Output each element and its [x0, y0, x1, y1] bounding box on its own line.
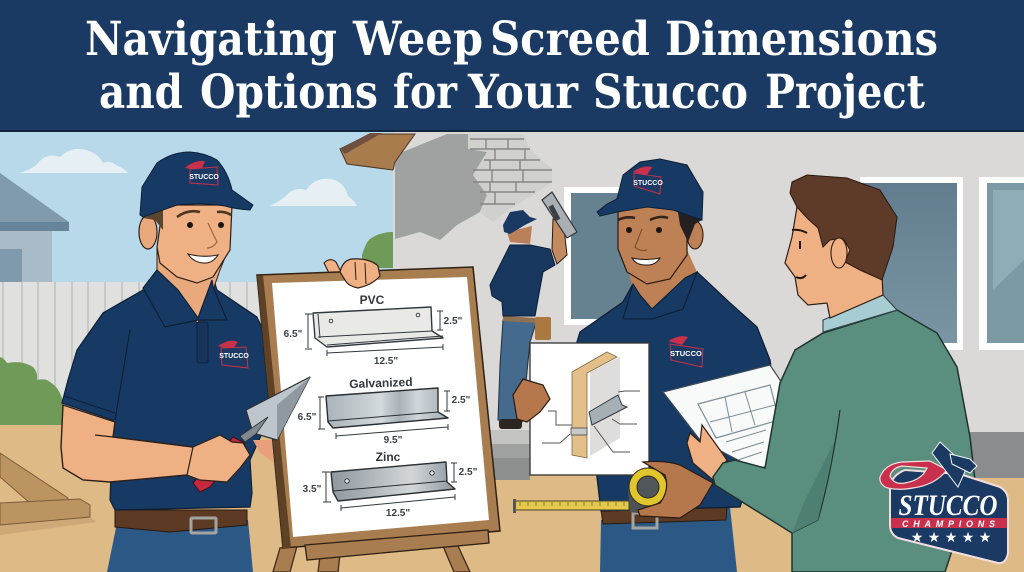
board frame — [257, 267, 500, 548]
cap logo: STUCCO — [633, 180, 663, 187]
tape blade — [513, 499, 629, 513]
torso — [490, 245, 555, 316]
forearm — [61, 405, 225, 482]
green bush behind board — [362, 232, 393, 268]
logo stars: ★ — [979, 530, 991, 546]
Zinc section — [303, 450, 478, 519]
logo wordmark: STUCCO — [898, 489, 998, 522]
title — [85, 12, 938, 120]
title banner — [0, 0, 1024, 132]
hair — [678, 212, 702, 242]
weep screed bracket — [589, 395, 627, 425]
smile — [632, 258, 660, 265]
thumb behind board — [324, 260, 342, 275]
bush left — [0, 357, 63, 425]
placket — [197, 322, 208, 363]
cap logo: STUCCO — [189, 174, 219, 181]
ground — [0, 425, 1024, 572]
entry steps — [480, 430, 530, 480]
logo red band — [891, 518, 1007, 528]
Galvanized labels: 9.5" — [384, 435, 403, 446]
roof eave — [340, 134, 415, 170]
eyebrows — [177, 211, 231, 217]
eyes — [626, 227, 662, 233]
Stucco Champions logo — [880, 442, 1008, 563]
hair — [143, 206, 163, 230]
title: for — [393, 65, 458, 120]
sweater body with arm — [713, 310, 975, 572]
sky — [0, 132, 420, 292]
Galvanized labels: 6.5" — [298, 412, 317, 423]
stucco wall — [393, 132, 1024, 432]
jeans — [600, 507, 737, 572]
tool belt — [503, 316, 551, 340]
easel legs — [273, 546, 470, 572]
hand on board top — [340, 259, 380, 288]
tape case — [628, 468, 667, 513]
trowel handle — [193, 437, 245, 492]
shirt logo: STUCCO — [670, 349, 702, 358]
Zinc labels: 12.5" — [386, 508, 410, 519]
title: and — [99, 65, 183, 120]
wood stud — [572, 352, 617, 458]
head — [618, 205, 687, 284]
logo stars: ★ — [962, 530, 974, 546]
jeans — [107, 520, 253, 572]
logo stars: ★ — [911, 530, 923, 546]
Galvanized labels — [298, 395, 471, 446]
cap — [140, 152, 253, 217]
heading Galvanized: Galvanized — [349, 375, 413, 391]
clip — [571, 428, 587, 435]
left worker hand and trowel — [187, 377, 310, 492]
client with blueprints — [663, 175, 975, 572]
center worker — [577, 159, 775, 572]
center worker left hand — [513, 379, 550, 422]
neighbouring house — [0, 173, 69, 285]
neck and head — [507, 226, 532, 244]
hand — [187, 435, 250, 482]
arm crease — [95, 435, 113, 437]
shirt logo — [218, 341, 249, 368]
smile — [188, 254, 218, 263]
hand on tape — [638, 461, 713, 518]
fence — [0, 282, 300, 432]
logo badge — [890, 470, 1008, 563]
logo trowel — [932, 442, 977, 487]
PVC labels: 6.5" — [284, 329, 303, 340]
cap logo — [185, 161, 219, 185]
cap — [597, 159, 703, 220]
heading PVC: PVC — [360, 293, 385, 307]
Zinc labels — [303, 467, 478, 519]
ground shadow — [0, 517, 97, 535]
shirt logo — [668, 336, 703, 367]
title: Screed — [490, 12, 650, 67]
Zinc labels: 3.5" — [303, 484, 322, 495]
logo swoosh — [880, 461, 947, 489]
PVC labels: 12.5" — [374, 356, 398, 367]
Galvanized dimension lines — [318, 391, 450, 439]
PVC labels: 2.5" — [444, 316, 463, 327]
cloud right — [270, 179, 357, 206]
neck — [627, 250, 697, 309]
trowel neck — [240, 417, 268, 442]
under-arm shade — [792, 440, 835, 533]
collar — [143, 270, 227, 327]
display board with dimensions — [257, 259, 500, 572]
ear — [687, 221, 703, 249]
belt — [115, 510, 247, 533]
Galvanized profile — [326, 388, 448, 428]
logo stars: ★ — [945, 530, 957, 546]
white panel — [272, 277, 489, 537]
logo stars: ★ — [928, 530, 940, 546]
Zinc labels: 2.5" — [459, 467, 478, 478]
trowel blade — [246, 377, 310, 440]
raised arm — [552, 219, 567, 264]
easel ledge — [305, 530, 489, 560]
Galvanized labels: 2.5" — [452, 395, 471, 406]
Zinc profile — [331, 462, 455, 501]
collar — [623, 272, 697, 319]
second hand behind blade — [253, 440, 273, 462]
scratch coat patch — [395, 134, 487, 240]
title: Your — [467, 65, 579, 120]
title: Weep — [352, 12, 483, 67]
Zinc dimension lines — [322, 463, 457, 511]
PVC profile — [313, 307, 443, 347]
title: Options — [200, 65, 378, 120]
detail drawing card — [530, 343, 649, 475]
logo tagline: CHAMPIONS — [902, 519, 995, 529]
leader lines — [542, 391, 640, 452]
title: Stucco — [593, 65, 748, 120]
sleeve detail — [64, 330, 130, 420]
exposed brick — [468, 134, 552, 222]
title: Project — [765, 65, 925, 120]
eye, brow and smile — [792, 230, 807, 278]
background scene — [0, 132, 1024, 572]
cap — [503, 210, 537, 234]
title: Dimensions — [665, 12, 938, 67]
sweater fold — [792, 410, 840, 533]
PVC dimension lines — [305, 311, 443, 356]
boots — [499, 419, 522, 429]
left worker — [61, 152, 270, 572]
PVC labels — [284, 316, 463, 367]
Galvanized section — [298, 375, 471, 446]
polo shirt — [62, 270, 270, 510]
heading Zinc: Zinc — [376, 450, 401, 464]
hawk trowel — [542, 192, 577, 238]
roof shingle edge — [340, 133, 382, 154]
cap logo — [633, 167, 663, 194]
lumber pile — [0, 453, 90, 525]
ear — [139, 215, 157, 249]
eyebrows — [618, 217, 668, 220]
foundation band — [770, 432, 1024, 478]
shirt collar — [823, 295, 897, 332]
ear — [831, 238, 847, 268]
neck — [157, 247, 228, 323]
PVC section — [284, 293, 463, 367]
background worker — [490, 192, 577, 429]
belt — [601, 505, 727, 528]
jeans — [498, 320, 537, 422]
hair — [790, 175, 897, 280]
head — [157, 205, 232, 283]
logo stars — [911, 530, 991, 546]
blueprints — [663, 365, 782, 468]
nose — [635, 229, 647, 251]
polo shirt — [577, 272, 775, 511]
wall windows — [564, 177, 1024, 350]
tape measure — [513, 461, 713, 518]
cloud left — [19, 149, 128, 173]
hand on blueprints — [687, 425, 727, 480]
head — [785, 200, 883, 318]
eyes — [187, 222, 224, 228]
title: Navigating — [85, 12, 337, 67]
nose — [207, 223, 217, 248]
shirt logo: STUCCO — [219, 353, 249, 360]
wall section — [590, 357, 620, 456]
